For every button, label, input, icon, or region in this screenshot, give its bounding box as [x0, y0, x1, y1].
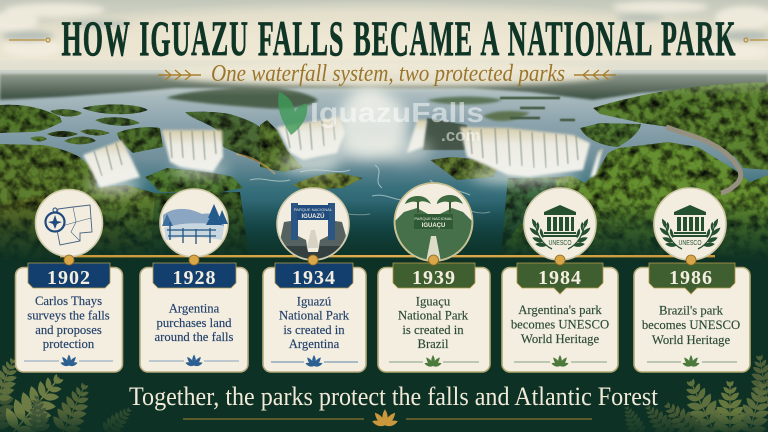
description: Iguazú: [297, 294, 332, 308]
background: sky: [0, 0, 768, 84]
year badge: 1934: [292, 267, 336, 289]
icon: Iguaçu park gate: [394, 183, 473, 262]
bottom dark green panel: [0, 262, 768, 432]
bottom fade: [0, 200, 768, 262]
waterfalls: [83, 117, 603, 188]
title: HOW IGUAZU FALLS BECAME A NATIONAL PARK: [62, 10, 735, 66]
watermark logo: [278, 92, 484, 145]
icon: Iguaçu park gate: PARQUE NACIONAL: [414, 216, 453, 221]
description: World Heritage: [652, 333, 730, 347]
panel: 1984: [502, 263, 618, 372]
icon: Iguazú park gate: PARQUE NACIONAL: [294, 207, 333, 212]
rainbow: [236, 154, 275, 174]
title flourish: left: [9, 38, 50, 42]
divider ornament: [149, 354, 239, 367]
description: Argentina: [289, 337, 340, 351]
falls shadow: [423, 118, 467, 150]
subtitle: One waterfall system, two protected parks: [211, 61, 565, 87]
description: and proposes: [35, 323, 102, 337]
card: [634, 268, 750, 372]
divider ornament: [24, 354, 113, 367]
divider ornament: [271, 355, 358, 368]
description: Argentina's park: [518, 303, 602, 317]
forest masses: [0, 82, 768, 265]
divider ornament: [389, 355, 479, 368]
card: [263, 268, 366, 372]
divider ornament: [514, 355, 607, 368]
description: World Heritage: [521, 332, 599, 346]
panel: 1939: [378, 263, 490, 372]
background: river and falls landscape: [0, 60, 768, 265]
subtitle ornament: right: [574, 70, 616, 80]
horizon haze: [0, 60, 768, 96]
timeline dots: [64, 255, 696, 265]
mist plume: [89, 84, 580, 192]
card: [16, 268, 122, 372]
icon: Iguazú park gate: IGUAZÚ: [302, 213, 324, 220]
icon: UNESCO temple 1986: [654, 188, 726, 260]
year badge: 1984: [538, 267, 582, 289]
icon: Iguazú park gate: [277, 188, 350, 262]
card: [378, 268, 490, 372]
fern ground shadow: [0, 412, 768, 432]
rapids foam: [250, 165, 490, 215]
icon: UNESCO temple 1984: UNESCO: [548, 240, 572, 247]
year badge: 1902: [47, 267, 91, 289]
subtitle ornament: left: [158, 70, 201, 80]
icon: UNESCO temple 1984: [524, 188, 596, 260]
icon: Iguaçu park gate: IGUAÇU: [422, 223, 445, 229]
description: protection: [43, 337, 95, 351]
boardwalk: [666, 127, 741, 193]
description: around the falls: [155, 330, 234, 344]
watermark logo: .com: [441, 126, 481, 145]
closing message: Together, the parks protect the falls and Atlantic Forest: [129, 382, 659, 411]
title flourish: right: [744, 38, 768, 42]
decorative ferns: lower left: [0, 353, 138, 432]
year badge: 1939: [412, 267, 456, 289]
year badge: 1928: [172, 267, 216, 289]
panel: 1902: [16, 263, 122, 372]
watermark logo: IguazuFalls: [310, 97, 484, 128]
description: becomes UNESCO: [511, 318, 609, 332]
icon: compass and map: [36, 190, 102, 256]
divider ornament: [647, 355, 737, 368]
description: is created in: [283, 323, 345, 337]
description: Carlos Thays: [35, 294, 102, 308]
panel: 1986: [634, 263, 750, 372]
year badge: 1986: [669, 267, 713, 289]
closing ornament: [183, 409, 592, 428]
description: Brazil: [417, 337, 449, 351]
description: is created in: [402, 323, 464, 337]
timeline line: [60, 255, 715, 257]
description: National Park: [398, 308, 469, 322]
description: purchases land: [156, 316, 232, 330]
small river islands: [500, 98, 575, 120]
description: Iguaçu: [416, 294, 451, 308]
icon: land and fence: [160, 189, 228, 257]
card: [140, 268, 248, 372]
description: Argentina: [169, 302, 220, 316]
distant forest: [0, 74, 768, 121]
icon: UNESCO temple 1986: UNESCO: [678, 240, 702, 247]
panel: 1928: [140, 263, 248, 372]
description: National Park: [279, 308, 350, 322]
subtitle glow: [163, 61, 613, 87]
description: surveys the falls: [27, 308, 110, 322]
card: [502, 268, 618, 372]
description: becomes UNESCO: [642, 318, 740, 332]
decorative ferns: lower right: [617, 352, 768, 432]
panel: 1934: [263, 263, 366, 372]
description: Brazil's park: [659, 304, 724, 318]
